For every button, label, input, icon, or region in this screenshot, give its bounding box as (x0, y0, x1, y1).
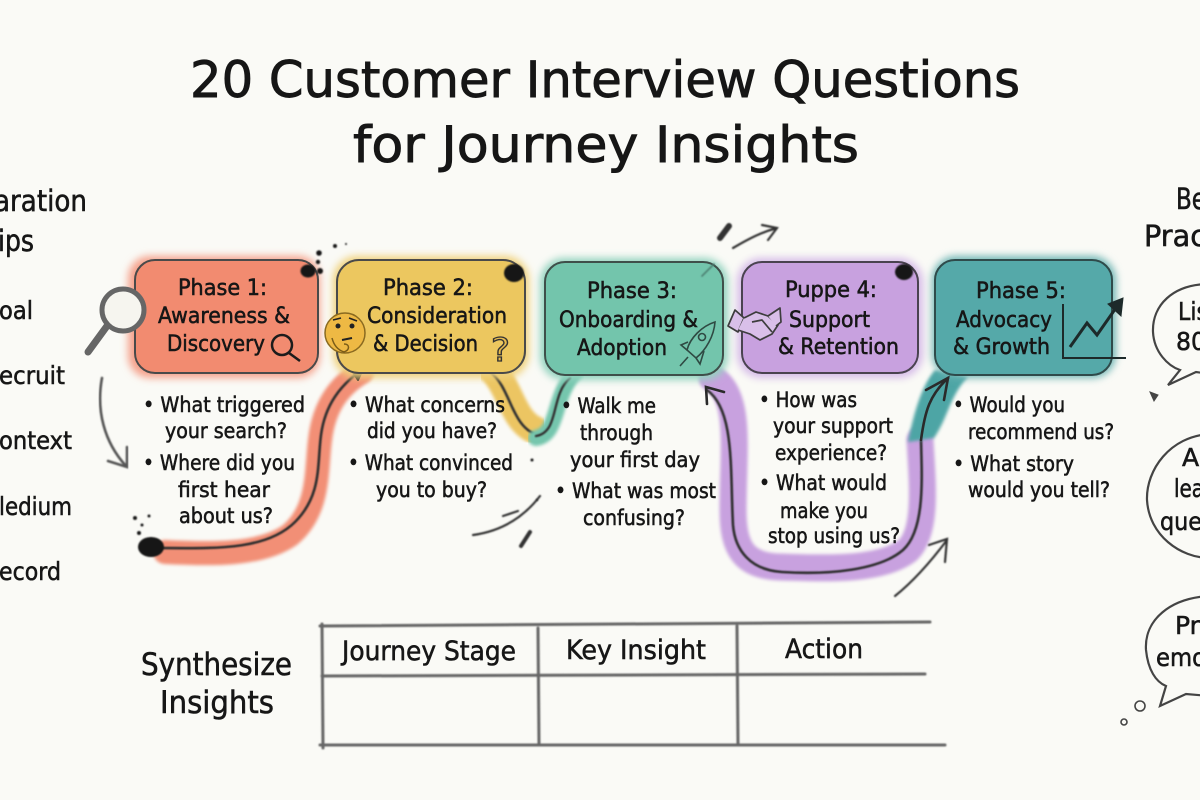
arrowhead: purple path start (706, 387, 724, 404)
panel: phase 1 (88, 256, 320, 378)
icon: rocket (680, 322, 715, 366)
questions: phase 3: confusing? (583, 506, 685, 530)
panel: preparation tips: ontext (0, 426, 72, 455)
questions: phase 3: • What was most (555, 479, 716, 503)
title: 20 Customer Interview Questions (190, 51, 1020, 109)
questions: phase 3: • Walk me (561, 394, 656, 418)
heading: synthesize insights: Insights (160, 685, 274, 721)
panel: phase 5 (932, 256, 1126, 378)
questions: phase 4: • What would (759, 471, 887, 495)
table: journey stage, key insight, action: Action (785, 634, 863, 665)
panel: phase 1: Awareness & (158, 304, 290, 329)
panel: phase 4: & Retention (778, 335, 899, 360)
icon: growth chart (1063, 298, 1126, 358)
panel: phase 1: Phase 1: (178, 276, 267, 301)
panel: preparation tips: ecruit (0, 361, 65, 390)
questions: phase 4: • How was (759, 388, 857, 412)
panel: phase 2: Consideration (367, 304, 507, 329)
table: journey stage, key insight, action: Journey Stage (340, 636, 516, 667)
journey path: yellow (490, 368, 540, 436)
speech bubble: listen (1150, 284, 1200, 401)
questions: phase 5: • Would you (953, 393, 1065, 417)
panel: phase 5: Phase 5: (976, 279, 1066, 304)
table: journey stage, key insight, action: Key Insight (566, 635, 706, 666)
title: for Journey Insights (353, 116, 859, 174)
questions: phase 1: your search? (165, 419, 287, 443)
arrow: purple path into phase 5 (921, 378, 948, 440)
panel: best practices (1121, 182, 1200, 725)
questions: phase 2 (348, 393, 513, 502)
speech bubble: probe emotions (1121, 596, 1200, 725)
speech bubble: avoid leading questions (1147, 434, 1200, 558)
questions: phase 4: stop using us? (768, 524, 900, 548)
questions: phase 1: first hear (178, 478, 270, 502)
questions: phase 1 (143, 393, 305, 528)
questions: phase 3: through (580, 421, 653, 445)
ink splatters (300, 243, 913, 501)
journey path: orange (150, 367, 364, 553)
panel: preparation tips (0, 184, 87, 586)
arrow: preparation to phase 1 (100, 378, 127, 467)
panel: phase 5: & Growth (953, 335, 1050, 360)
questions: phase 4: make you (780, 499, 868, 523)
panel: preparation tips: oal (0, 296, 33, 325)
speech bubble: avoid leading questions: A (1182, 443, 1199, 472)
panel: phase 3: Adoption (577, 336, 667, 361)
questions: phase 2: did you have? (367, 419, 497, 443)
questions: phase 4: your support (773, 414, 893, 438)
icon: small magnifying glass (272, 335, 300, 361)
icon: thinking face (325, 313, 365, 353)
panel: phase 4: Support (789, 308, 870, 333)
wash: teal tail to phase 5 (908, 370, 968, 442)
questions: phase 1: • Where did you (143, 451, 295, 475)
questions: phase 3 (555, 394, 716, 530)
panel: phase 2: & Decision (373, 332, 478, 357)
panel: phase 3 (540, 258, 728, 380)
questions: phase 2: • What concerns (348, 393, 505, 417)
questions: phase 4: experience? (775, 441, 887, 465)
panel: phase 3: Onboarding & (559, 308, 698, 333)
icon: question mark: ? (491, 331, 510, 369)
questions: phase 5 (953, 393, 1114, 502)
table: journey stage, key insight, action (320, 622, 945, 748)
arrows: sketch strokes (473, 225, 947, 596)
speech bubble: probe emotions: Pr (1175, 611, 1200, 640)
title (190, 51, 1020, 174)
icon: handshake (728, 308, 781, 340)
panel: phase 5: Advocacy (956, 308, 1052, 333)
questions: phase 5: recommend us? (968, 420, 1114, 444)
journey path: green (536, 372, 576, 438)
questions: phase 4 (759, 388, 900, 548)
panel: preparation tips: ecord (0, 557, 61, 586)
heading: synthesize insights (141, 647, 292, 721)
questions: phase 1: • What triggered (143, 393, 305, 417)
panel: phase 3: Phase 3: (587, 279, 677, 304)
questions: phase 2: • What convinced (348, 451, 513, 475)
panel: phase 4 (728, 258, 923, 378)
questions: phase 1: about us? (179, 504, 273, 528)
questions: phase 5: • What story (953, 452, 1074, 476)
panel: phase 2 (325, 256, 529, 378)
panel: phase 1: Discovery (167, 332, 265, 357)
panel: phase 2: Phase 2: (383, 276, 473, 301)
heading: synthesize insights: Synthesize (141, 647, 292, 683)
questions: phase 2: you to buy? (376, 478, 487, 502)
journey path: purple (707, 378, 922, 573)
questions: phase 3: your first day (570, 448, 700, 472)
questions: phase 5: would you tell? (968, 478, 1110, 502)
icon: large magnifying glass (88, 289, 144, 352)
ink blot: path start (133, 514, 164, 557)
panel: phase 4: Puppe 4: (785, 278, 877, 303)
panel: preparation tips: ledium (0, 492, 72, 521)
